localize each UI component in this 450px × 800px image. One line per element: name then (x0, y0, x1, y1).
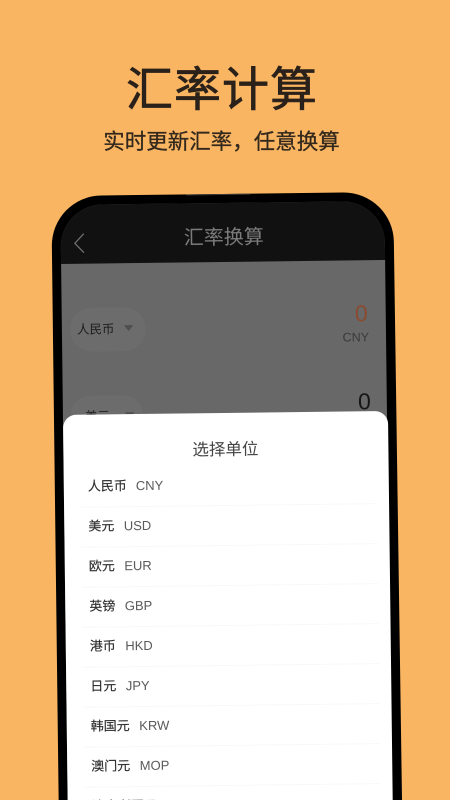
row: HKD: 港币 (90, 638, 116, 654)
row: KRW (91, 718, 170, 734)
currency selector pill: CNY (70, 307, 146, 352)
row: GBP: 英镑 (89, 598, 115, 614)
value: USD amount: 0 (358, 388, 371, 414)
nav title: 汇率换算 (184, 226, 264, 249)
row: KRW: 韩国元 (91, 718, 130, 734)
title: 汇率计算 (126, 63, 318, 116)
label: renminbi: 人民币 (77, 322, 115, 337)
subtitle: 实时更新汇率，任意换算 (103, 130, 340, 154)
currency row: USD (71, 388, 371, 434)
phone top highlight (186, 194, 250, 195)
row: HKD: HKD (125, 638, 153, 653)
icon: dropdown arrow (124, 325, 133, 331)
phone content (68, 192, 371, 434)
row: HKD (90, 638, 153, 654)
screen background (61, 202, 392, 800)
row: AUD (92, 797, 194, 800)
row: EUR (89, 558, 152, 574)
row: USD (88, 518, 151, 534)
currency selector pill: USD (71, 395, 143, 434)
row: EUR: EUR (124, 558, 152, 573)
row: EUR: 欧元 (89, 558, 115, 574)
phone mockup (52, 192, 402, 800)
row: GBP: GBP (125, 598, 152, 613)
currency row: CNY (70, 300, 370, 352)
row: MOP (91, 758, 169, 774)
row: CNY (88, 478, 164, 494)
row: JPY: JPY (126, 678, 150, 693)
label: US dollar: 美元 (85, 409, 110, 424)
row: GBP (89, 598, 152, 614)
navigation bar (61, 202, 385, 264)
row: MOP: MOP (140, 758, 169, 773)
value: CNY amount: 0 (355, 300, 368, 326)
row: USD: 美元 (88, 518, 114, 534)
row: CNY: CNY (136, 478, 164, 493)
icon: back arrow (75, 234, 84, 253)
row: JPY (90, 678, 150, 694)
bottom sheet (63, 411, 393, 800)
row: KRW: KRW (139, 718, 170, 733)
sheet title: 选择单位 (192, 440, 258, 459)
row: JPY: 日元 (90, 678, 116, 694)
row: USD: USD (124, 518, 151, 533)
row: MOP: 澳门元 (91, 758, 130, 774)
unit: CNY: CNY (343, 330, 370, 345)
icon: dropdown arrow USD (125, 412, 134, 418)
currency list (80, 438, 381, 800)
row: CNY: 人民币 (88, 478, 127, 494)
phone body (52, 192, 402, 800)
